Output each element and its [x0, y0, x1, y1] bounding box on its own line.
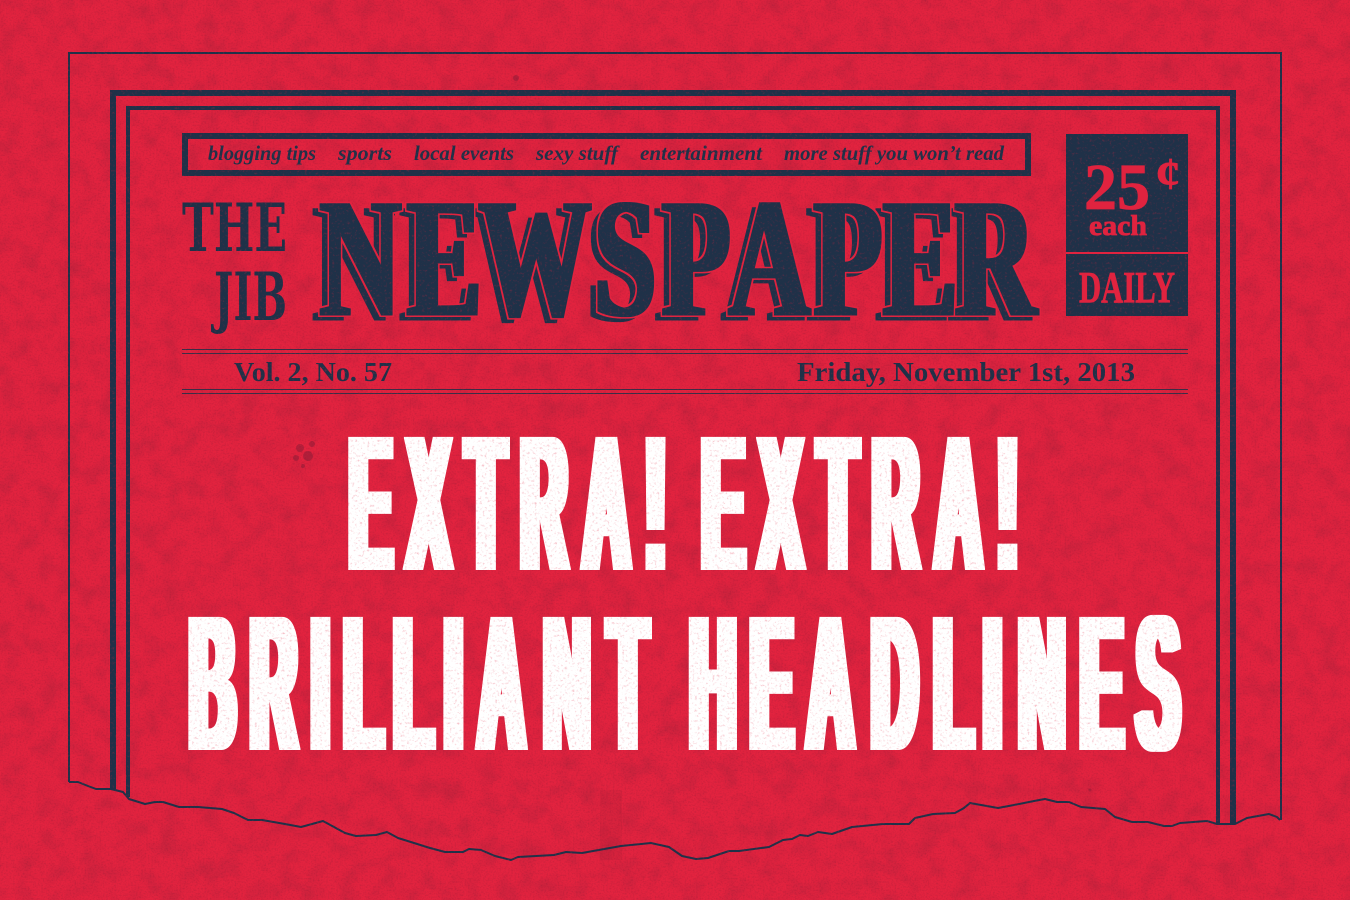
navigation bar — [185, 136, 1028, 173]
headline: BRILLIANT HEADLINES — [190, 578, 1179, 791]
dateline with double rules: Friday, November 1st, 2013 — [797, 357, 1135, 387]
navigation bar: local events — [414, 141, 514, 165]
masthead: The JIB: THE — [182, 189, 287, 267]
dateline with double rules: Vol. 2, No. 57 — [234, 357, 392, 387]
headline: EXTRA! EXTRA! — [350, 398, 1018, 611]
masthead: NEWSPAPER: NEWSPAPER — [320, 165, 1038, 353]
price box: 25 — [1084, 151, 1150, 224]
navigation bar: sexy stuff — [535, 141, 620, 165]
masthead: NEWSPAPER: NEWSPAPER — [320, 165, 1038, 353]
price box — [1066, 134, 1188, 316]
torn paper edge — [69, 782, 1280, 860]
newspaper page frames — [69, 53, 1281, 824]
dateline with double rules — [182, 350, 1188, 394]
navigation bar: entertainment — [640, 141, 763, 165]
headline — [190, 398, 1179, 791]
price box: each — [1089, 211, 1147, 242]
masthead: The JIB — [182, 189, 287, 336]
navigation bar: blogging tips — [208, 141, 316, 165]
price box: ¢ — [1156, 148, 1180, 199]
masthead: The JIB: JIB — [211, 258, 287, 336]
navigation bar: more stuff you won’t read — [784, 141, 1004, 165]
navigation bar: sports — [337, 141, 392, 165]
price box: DAILY — [1079, 263, 1175, 312]
masthead: NEWSPAPER: NEWSPAPER — [313, 170, 1031, 358]
